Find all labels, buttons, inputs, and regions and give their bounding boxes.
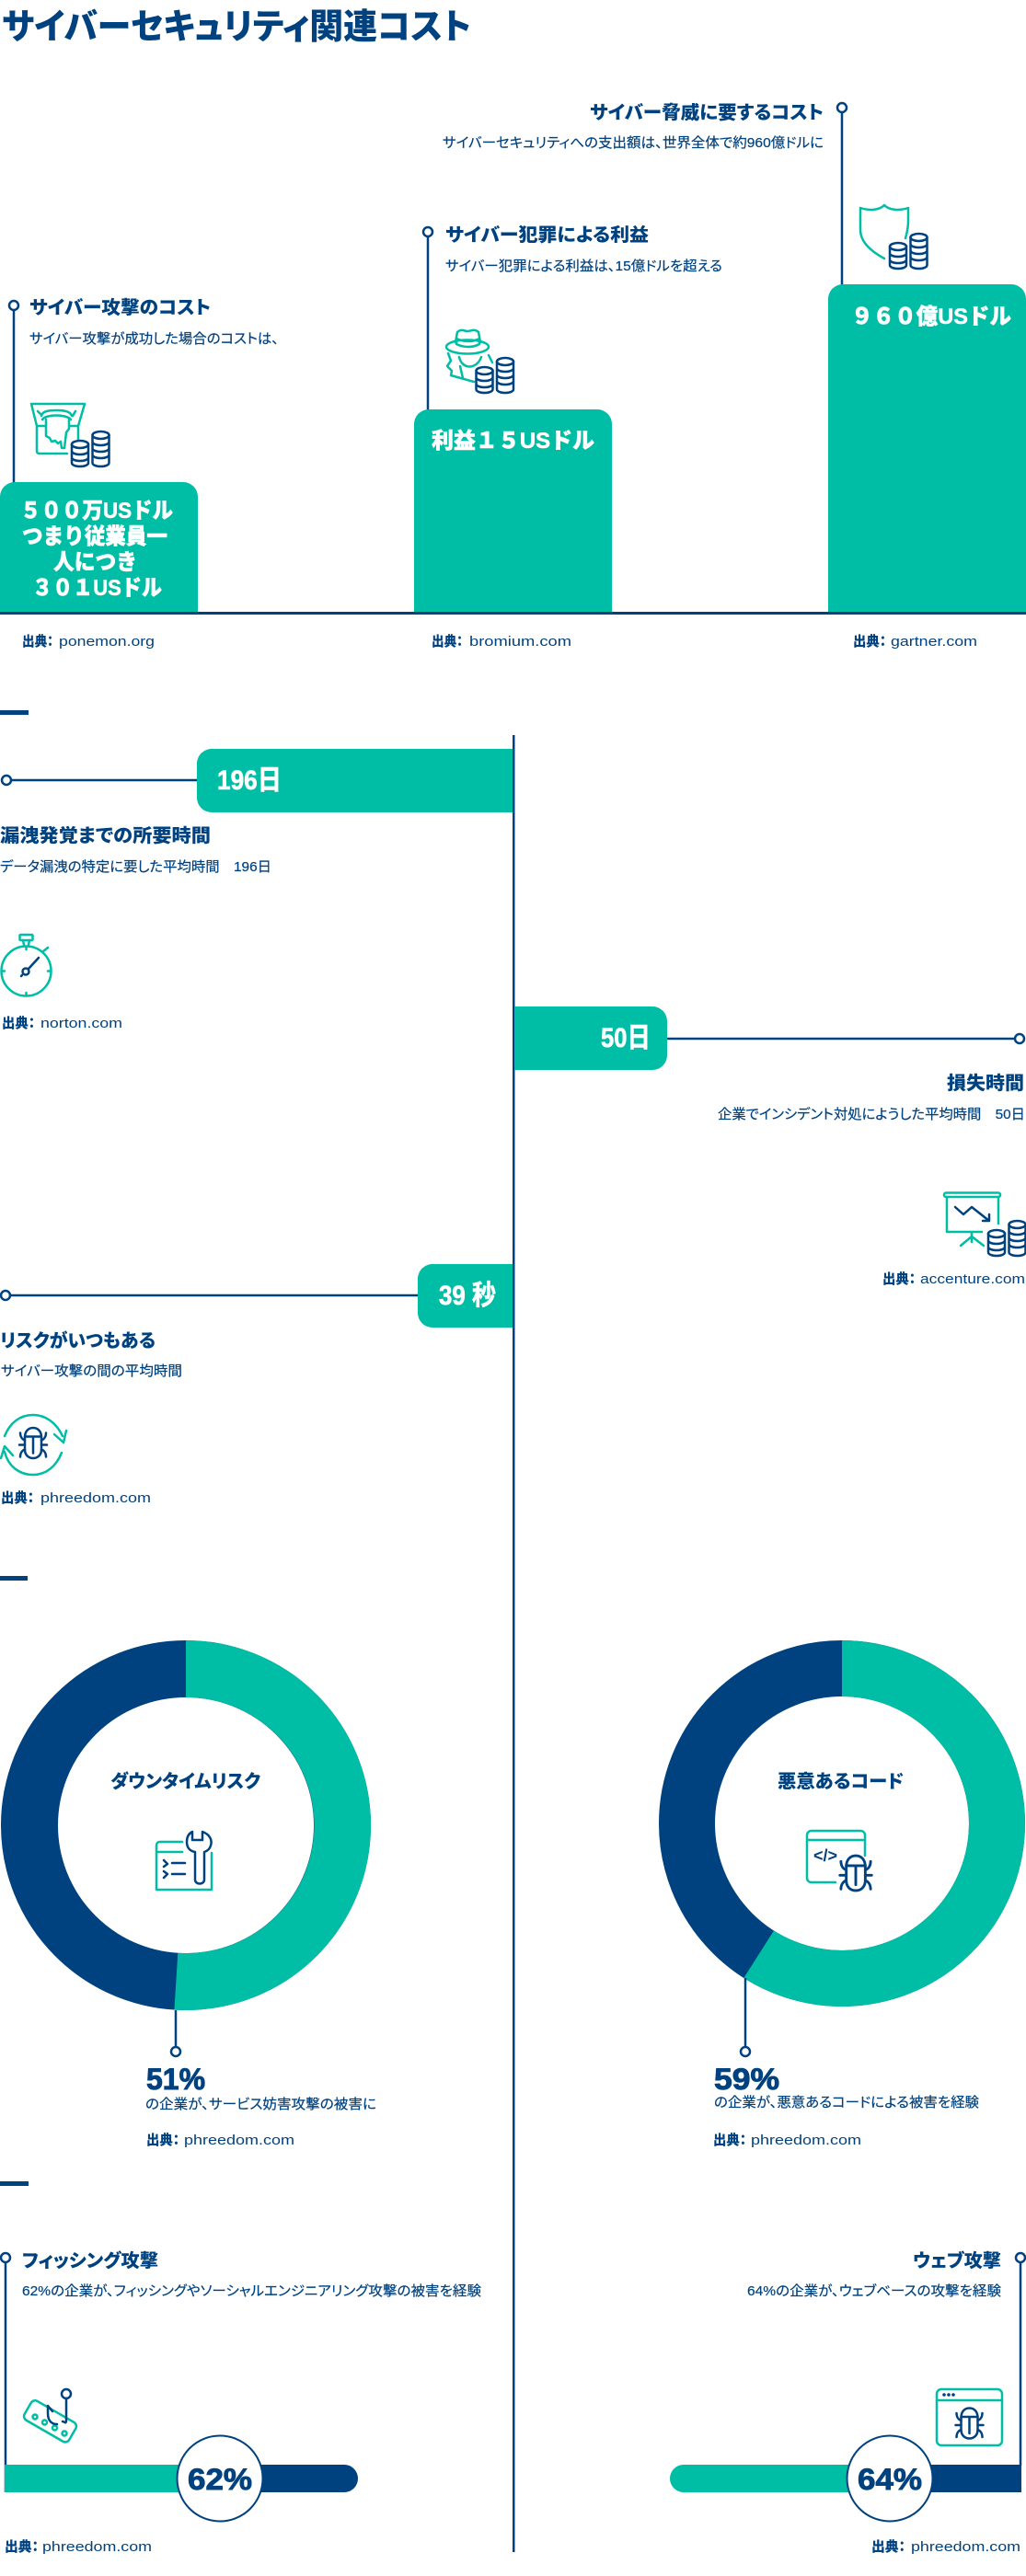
panel: cybercrime profit: サイバー犯罪による利益は、15億ドルを超える: [445, 259, 722, 274]
panel: cost of cyber attack: つまり従業員一: [22, 524, 167, 549]
center timeline axis: [513, 735, 515, 2552]
source: phreedom.com: [146, 2132, 294, 2148]
source: ponemon.org: 出典：: [22, 633, 53, 650]
panel: downtime risk donut: の企業が、サービス妨害攻撃の被害に: [145, 2097, 376, 2112]
source: norton.com: [2, 1015, 122, 1031]
panel: cost of cyber threats: ９６０億USドル: [851, 305, 1011, 329]
panel: lost time: 50日: [601, 1023, 651, 1053]
source: phreedom.com: phreedom.com: [911, 2539, 1020, 2555]
panel: phishing attacks: フィッシング攻撃: [22, 2249, 158, 2271]
source: bromium.com: [432, 633, 571, 650]
panel: lost time: 企業でインシデント対処にようした平均時間 50日: [718, 1106, 1025, 1122]
bar: 196 days: [197, 749, 513, 812]
source: gartner.com: gartner.com: [891, 634, 977, 650]
icon: presentation chart with coins: [944, 1192, 1025, 1256]
panel: always at risk: サイバー攻撃の間の平均時間: [1, 1363, 182, 1379]
panel: time to detect breach: [0, 749, 513, 1031]
panel: time to detect breach: 漏洩発覚までの所要時間: [0, 824, 211, 846]
axis: [0, 612, 1026, 615]
icon: bug with cycle arrows: [1, 1415, 66, 1475]
source: phreedom.com: [871, 2538, 1020, 2555]
source: phreedom.com: 出典：: [146, 2132, 179, 2148]
source: phreedom.com: [713, 2132, 861, 2148]
panel: malicious code donut: 59%: [714, 2063, 779, 2096]
source: accenture.com: [882, 1271, 1025, 1287]
progress bar 62%: [5, 2436, 358, 2521]
source: phreedom.com: 出典：: [713, 2132, 746, 2148]
source: phreedom.com: phreedom.com: [42, 2539, 152, 2555]
panel: cost of cyber threats: サイバー脅威に要するコスト: [590, 101, 824, 123]
source: norton.com: 出典：: [2, 1015, 35, 1031]
panel: phishing attacks: 62%の企業が、フィッシングやソーシャルエンジニアリング攻撃の被害を経験: [22, 2283, 481, 2299]
icon: browser with bug: [937, 2389, 1002, 2445]
source: phreedom.com: [5, 2538, 152, 2555]
bar chart: cyber costs: [0, 101, 1026, 650]
source: phreedom.com: 出典：: [871, 2538, 905, 2555]
panel: downtime risk donut: ダウンタイムリスク: [110, 1770, 260, 1792]
source: gartner.com: [853, 633, 977, 650]
icon: data theft hand: [31, 404, 109, 466]
source: phreedom.com: phreedom.com: [184, 2133, 294, 2148]
panel: downtime risk donut: [29, 1640, 376, 2148]
source: ponemon.org: [22, 633, 155, 650]
panel: web attacks: 64%の企業が、ウェブベースの攻撃を経験: [747, 2283, 1001, 2299]
panel: phishing attacks: [1, 2249, 481, 2555]
source: bromium.com: bromium.com: [469, 634, 571, 650]
source: accenture.com: 出典：: [882, 1271, 916, 1287]
panel: cybercrime profit: [414, 224, 722, 613]
panel: cost of cyber attack: サイバー攻撃が成功した場合のコストは、: [29, 331, 279, 347]
donut chart 51%: [29, 1640, 371, 2010]
icon: stopwatch: [2, 935, 52, 995]
source: norton.com: norton.com: [40, 1016, 122, 1031]
panel: cost of cyber attack: 人につき: [53, 550, 137, 575]
source: phreedom.com: [1, 1489, 151, 1506]
panel: cost of cyber attack: ５００万USドル: [20, 499, 173, 523]
bar: 50 days: [514, 1006, 667, 1070]
source: phreedom.com: 出典：: [1, 1489, 34, 1506]
source: bromium.com: 出典：: [432, 633, 463, 650]
panel: malicious code donut: の企業が、悪意あるコードによる被害を経験: [714, 2095, 979, 2110]
progress bar 64%: [670, 2436, 1021, 2521]
source: phreedom.com: phreedom.com: [40, 1490, 151, 1506]
section dash: [0, 2181, 29, 2186]
panel: always at risk: [0, 1264, 513, 1506]
source: phreedom.com: phreedom.com: [751, 2133, 861, 2148]
panel: malicious code donut: 悪意あるコード: [778, 1771, 904, 1792]
icon: code window with bug: </>: [813, 1846, 837, 1865]
panel: cost of cyber attack: ３０１USドル: [32, 576, 162, 601]
bar: 39 seconds: [418, 1264, 513, 1328]
panel: web attacks: [670, 2249, 1025, 2555]
panel: cost of cyber threats: [443, 101, 1026, 613]
panel: malicious code donut: [686, 1640, 1025, 2148]
source: gartner.com: 出典：: [853, 633, 886, 650]
donut chart 59%: [686, 1640, 1025, 2007]
icon: hacker with coins: [446, 330, 513, 393]
title: サイバーセキュリティ関連コスト: [2, 8, 471, 47]
section dash: [0, 1576, 28, 1581]
icon: fishing hook and password: [22, 2389, 78, 2444]
panel: always at risk: 39 秒: [439, 1281, 496, 1311]
panel: always at risk: リスクがいつもある: [0, 1329, 156, 1351]
source: accenture.com: accenture.com: [920, 1271, 1025, 1287]
panel: cybercrime profit: サイバー犯罪による利益: [445, 224, 649, 246]
panel: downtime risk donut: 51%: [146, 2063, 205, 2096]
progress bar 64%: 64%: [858, 2463, 922, 2496]
icon: wrench and terminal: [156, 1832, 212, 1890]
icon: shield with coins: [860, 205, 928, 269]
source: phreedom.com: 出典：: [5, 2538, 39, 2555]
panel: cost of cyber threats: サイバーセキュリティへの支出額は、世界全体で約960億ドルに: [443, 135, 824, 151]
panel: time to detect breach: データ漏洩の特定に要した平均時間 196日: [0, 858, 271, 875]
source: ponemon.org: ponemon.org: [59, 634, 155, 650]
panel: cost of cyber attack: サイバー攻撃のコスト: [29, 296, 211, 318]
icon: code window with bug: [807, 1831, 871, 1891]
panel: time to detect breach: 196日: [217, 765, 282, 796]
panel: lost time: [514, 1006, 1025, 1287]
panel: lost time: 損失時間: [947, 1072, 1024, 1094]
panel: web attacks: ウェブ攻撃: [913, 2249, 1001, 2271]
section dash: [0, 710, 29, 715]
progress bar 62%: 62%: [188, 2463, 252, 2496]
panel: cybercrime profit: 利益１５USドル: [432, 429, 594, 454]
panel: cost of cyber attack: [0, 296, 279, 613]
